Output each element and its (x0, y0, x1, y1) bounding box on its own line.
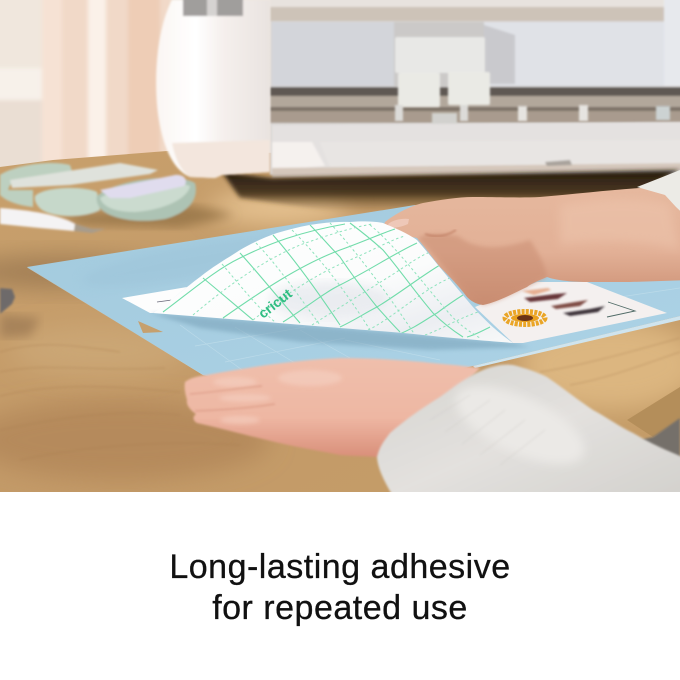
scissors and tools on the desk (0, 163, 235, 233)
pen (0, 208, 75, 231)
fingernail (388, 219, 409, 228)
metal strip (10, 163, 158, 188)
caption heading: Long-lasting adhesive (169, 548, 511, 586)
desk side and floor corner (627, 387, 680, 462)
arm and hand (384, 188, 680, 305)
background wall and curtain (0, 0, 680, 180)
finger crease (425, 230, 456, 236)
small printed boots and marks (522, 288, 605, 316)
laptop corner (0, 288, 40, 338)
caption heading: for repeated use (212, 589, 468, 627)
caption heading (169, 548, 511, 627)
shadow under the sheet (150, 313, 530, 350)
knit ribs (430, 395, 545, 465)
cutting machine (156, 0, 680, 212)
blue cutting mat (27, 205, 680, 405)
solid grid (163, 223, 490, 337)
mat grid lines (180, 288, 680, 372)
sweater sleeve (377, 365, 680, 500)
dashed grid (193, 223, 480, 338)
machine tray (272, 122, 680, 178)
lower hand (185, 358, 480, 457)
grey tint (270, 282, 390, 318)
finger gaps (190, 386, 275, 411)
printed sheet with sunflower and boots (475, 282, 667, 343)
mat notch (138, 321, 163, 333)
machine carriage (395, 37, 670, 128)
cricut logo on sheet: cricut (255, 285, 295, 321)
sleeve cuff (637, 166, 680, 220)
purple tool (100, 175, 186, 198)
tool shadow (60, 205, 235, 228)
sunflower (505, 312, 545, 324)
wood light and shadow patches (0, 192, 680, 480)
storage cup (156, 0, 270, 178)
arm highlight (560, 199, 680, 250)
peeled protective sheet with green grid (153, 221, 513, 343)
machine shadow on desk (222, 170, 680, 212)
machine body (270, 0, 680, 175)
upper hand and sleeve (384, 166, 680, 305)
photo: cutting mat on wooden desk with hands peeling the protective sheet (0, 0, 680, 492)
palm shadow (418, 234, 547, 305)
scissor handles (0, 163, 75, 207)
wooden desk (0, 151, 680, 492)
white paper under the sheet (122, 287, 187, 313)
knuckle highlights (213, 370, 342, 424)
